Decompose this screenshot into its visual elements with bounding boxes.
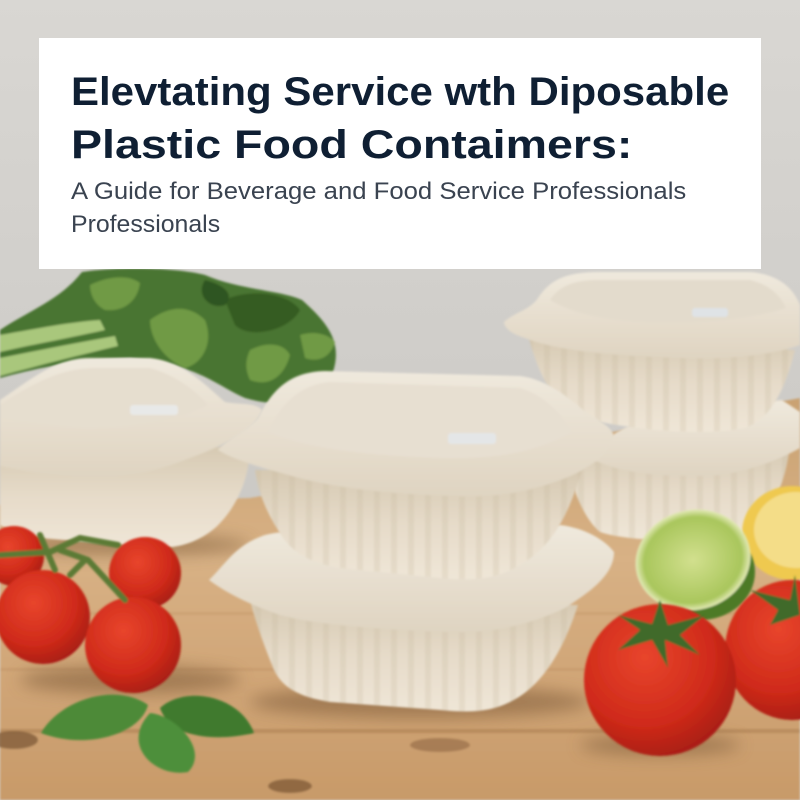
basil leaves bbox=[41, 695, 254, 773]
lime half bbox=[624, 497, 762, 623]
heading: Elevtating Service wth Diposable bbox=[71, 70, 729, 114]
wall bbox=[0, 0, 800, 520]
lettuce bbox=[0, 268, 336, 403]
subheading bbox=[71, 178, 686, 238]
lemon slice bbox=[742, 486, 800, 580]
subheading: A Guide for Beverage and Food Service Professionals bbox=[71, 178, 686, 205]
front top container bbox=[218, 371, 614, 579]
subheading: Professionals bbox=[71, 211, 220, 238]
wooden table bbox=[0, 398, 800, 800]
title card bbox=[39, 38, 761, 269]
back right container, top bbox=[504, 272, 800, 432]
heading: Plastic Food Contaimers: bbox=[71, 123, 632, 167]
back right container, bottom bbox=[566, 400, 800, 540]
left container bbox=[0, 358, 262, 548]
tomatoes left on the vine bbox=[0, 526, 181, 693]
heading bbox=[71, 70, 729, 167]
table shadows bbox=[10, 535, 740, 755]
tomatoes right bbox=[584, 575, 800, 756]
front bottom container bbox=[209, 525, 614, 711]
